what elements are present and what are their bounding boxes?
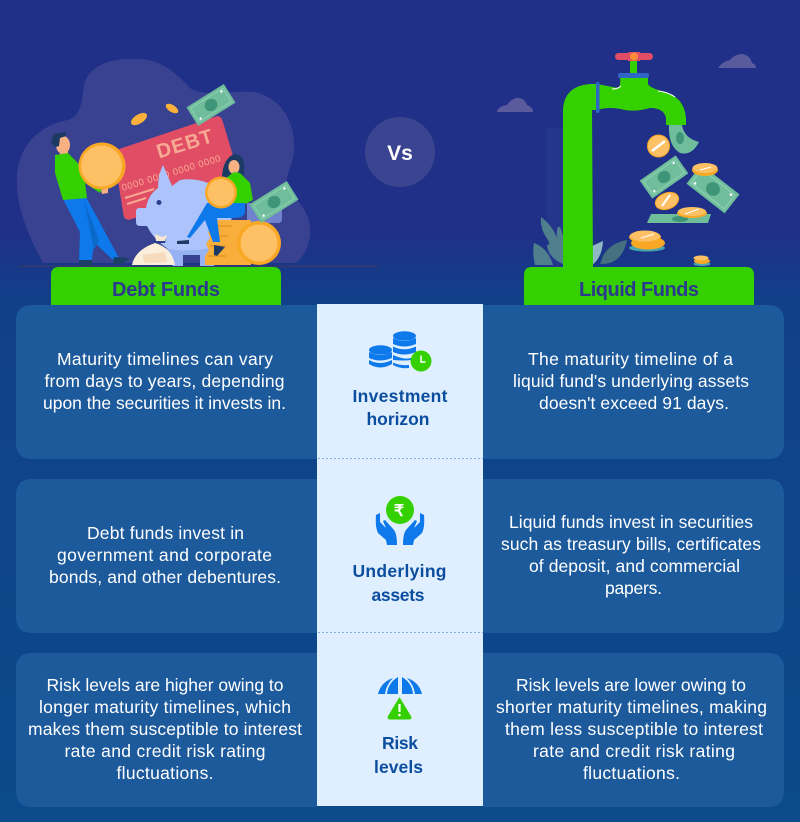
background blob	[17, 59, 310, 263]
panel: debt investment horizon: Maturity timelines can vary	[57, 349, 273, 369]
blue band	[596, 82, 600, 113]
panel: debt risk levels: rate and credit risk rating	[64, 741, 266, 761]
money bag	[132, 234, 175, 265]
coin stack	[205, 220, 281, 265]
label: Debt Funds: Debt Funds	[112, 279, 220, 301]
panel: debt investment horizon	[16, 305, 317, 459]
versus badge	[365, 117, 435, 187]
panel: debt investment horizon: from days to years, depending	[44, 371, 284, 391]
clouds	[497, 54, 756, 112]
heading: Investment horizon: Investment	[352, 386, 448, 406]
falling money	[629, 125, 740, 266]
panel: debt risk levels: Risk levels are higher owing to	[46, 675, 284, 695]
versus badge: Vs	[387, 142, 413, 165]
illustration: liquid funds tap	[497, 52, 756, 267]
panel: liquid risk levels: rate and credit risk rating	[533, 741, 735, 761]
label: Liquid Funds: Liquid Funds	[579, 279, 699, 301]
panel: debt investment horizon: upon the securities it invests in.	[43, 393, 286, 413]
label: Liquid Funds	[524, 267, 754, 305]
panel: liquid risk levels: fluctuations.	[583, 763, 680, 783]
second banknote	[250, 181, 298, 223]
panel: liquid underlying assets: papers.	[605, 578, 662, 598]
man with coin	[51, 132, 130, 266]
panel: liquid investment horizon: doesn't exceed 91 days.	[539, 393, 729, 413]
center column	[317, 304, 483, 806]
valve	[615, 52, 653, 78]
illustration: debt funds	[17, 59, 378, 267]
tap shadow	[546, 128, 563, 267]
panel: liquid investment horizon	[483, 305, 784, 459]
panel: liquid risk levels: them less susceptible to interest	[505, 719, 763, 739]
faucet	[563, 77, 686, 267]
panel: liquid underlying assets	[483, 479, 784, 633]
icon: hands holding rupee: ₹	[394, 503, 404, 520]
panel: debt risk levels: fluctuations.	[116, 763, 214, 783]
piggy bank	[136, 165, 282, 266]
panel: debt risk levels	[16, 653, 317, 807]
panel: liquid risk levels: Risk levels are lower owing to	[516, 675, 746, 695]
credit card: DEBT	[154, 125, 216, 163]
panel: liquid underlying assets: such as treasury bills, certificates	[501, 534, 761, 554]
panel: liquid underlying assets: of deposit, and commercial	[529, 556, 740, 576]
icon: hands holding rupee	[376, 496, 424, 545]
panel: liquid risk levels: shorter maturity timelines, making	[496, 697, 767, 717]
heading: Underlying assets	[352, 561, 446, 605]
panel: debt underlying assets	[16, 479, 317, 633]
icon: umbrella with warning	[378, 677, 422, 719]
panel: debt underlying assets: government and corporate	[57, 545, 272, 565]
ground line	[18, 266, 378, 267]
panel: liquid investment horizon: The maturity timeline of a	[528, 349, 733, 369]
credit card: 0000 0000 0000 0000	[120, 153, 222, 194]
icon: coins and clock	[369, 331, 432, 372]
highlights	[612, 86, 675, 97]
heading: Underlying assets: assets	[372, 585, 425, 605]
heading: Investment horizon: horizon	[366, 409, 430, 429]
heading: Investment horizon	[352, 386, 448, 429]
heading: Risk levels: Risk	[382, 733, 418, 753]
woman with coin	[177, 154, 253, 256]
panel: debt risk levels: makes them susceptible to interest	[28, 719, 302, 739]
panel: liquid investment horizon: liquid fund's underlying assets	[513, 371, 749, 391]
credit card	[115, 118, 240, 218]
flying coins	[129, 102, 180, 128]
heading: Risk levels	[374, 733, 423, 777]
panel: liquid underlying assets: Liquid funds invest in securities	[509, 512, 753, 532]
panel: debt risk levels: longer maturity timelines, which	[39, 697, 291, 717]
label: Debt Funds	[51, 267, 281, 305]
heading: Underlying assets: Underlying	[352, 561, 446, 581]
panel: debt underlying assets: bonds, and other debentures.	[49, 567, 281, 587]
panel: debt underlying assets: Debt funds invest in	[87, 523, 244, 543]
banknote	[187, 84, 235, 126]
panel: liquid risk levels	[483, 653, 784, 807]
leaves	[533, 217, 627, 265]
heading: Risk levels: levels	[374, 757, 423, 777]
